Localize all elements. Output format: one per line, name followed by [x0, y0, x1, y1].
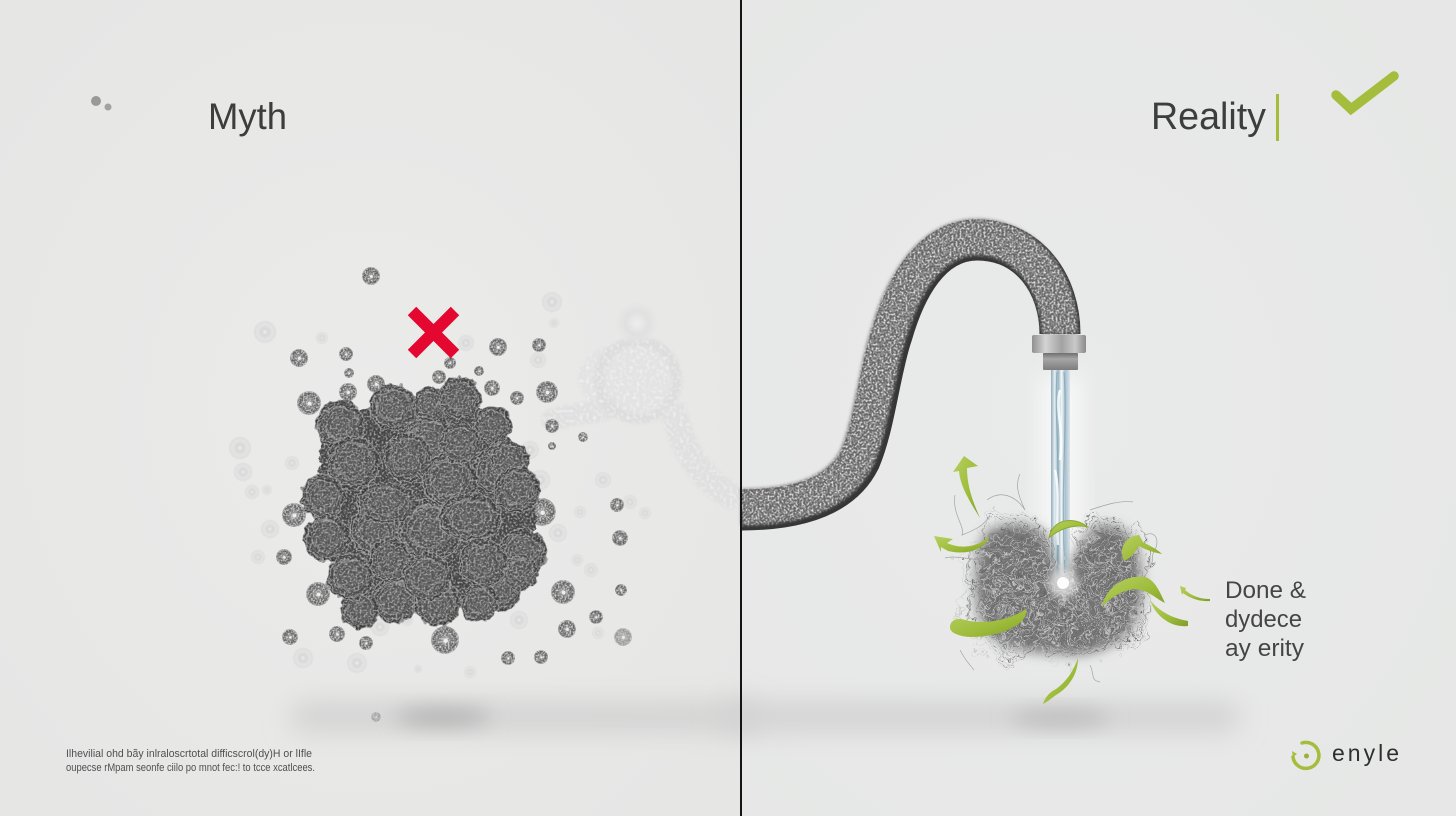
tangled hair clump [949, 509, 1154, 665]
side caption: Done & [1225, 577, 1306, 604]
icon: green check mark [1336, 76, 1394, 109]
leaf: top over water [1049, 520, 1088, 538]
leaf: bottom [1043, 658, 1078, 704]
green title bar [1276, 94, 1279, 141]
logo: enyle mark [1292, 742, 1319, 768]
light, faded bubbles [229, 292, 658, 678]
footnote text: oupecse rMpam seonfe ciilo po mnot fec:! to tcce xcatlcees. [66, 762, 315, 774]
side caption: ay erity [1225, 635, 1304, 662]
floor shadow: reality side [720, 702, 1240, 732]
logo: enyle wordmark: enyle [1332, 740, 1399, 766]
floor shadow: myth side [290, 702, 760, 732]
water impact glow [1048, 568, 1078, 598]
icon: two grey dots [91, 96, 112, 110]
faucet collar and nozzle [1032, 335, 1086, 370]
footnote text: Ilhevilial ohd bãy inlraloscrtotal difficscrol(dy)H or lIfle [66, 748, 312, 760]
arrow: right small [1180, 586, 1210, 601]
title: Reality: Reality [1151, 96, 1266, 138]
leaf: large right [1102, 577, 1165, 607]
title: Myth: Myth [208, 96, 287, 137]
water stream [1051, 370, 1070, 578]
dark metallic bubbles [276, 267, 632, 722]
footnote text [66, 748, 315, 774]
panel: reality background [740, 0, 1456, 816]
leaf: right upper [1122, 535, 1162, 561]
textured hose [741, 237, 1060, 510]
soft body of the hair clump [976, 524, 1142, 654]
panel: myth background [0, 0, 740, 816]
stray hair strands [945, 474, 1157, 682]
side caption [1225, 577, 1306, 662]
tangled yarn clump [301, 377, 547, 629]
arrow: upward curl [953, 456, 980, 518]
faded hose dissolving on the myth side [552, 341, 738, 500]
glow around water [1040, 375, 1082, 565]
arrow: left curl [934, 536, 989, 553]
side caption: dydece [1225, 606, 1302, 633]
centre divider line [740, 0, 742, 816]
green arrows and leaf fragments [934, 456, 1210, 704]
icon: red X [412, 311, 455, 354]
leaf: small right tail [1150, 600, 1188, 626]
leaf: large left [950, 609, 1026, 637]
